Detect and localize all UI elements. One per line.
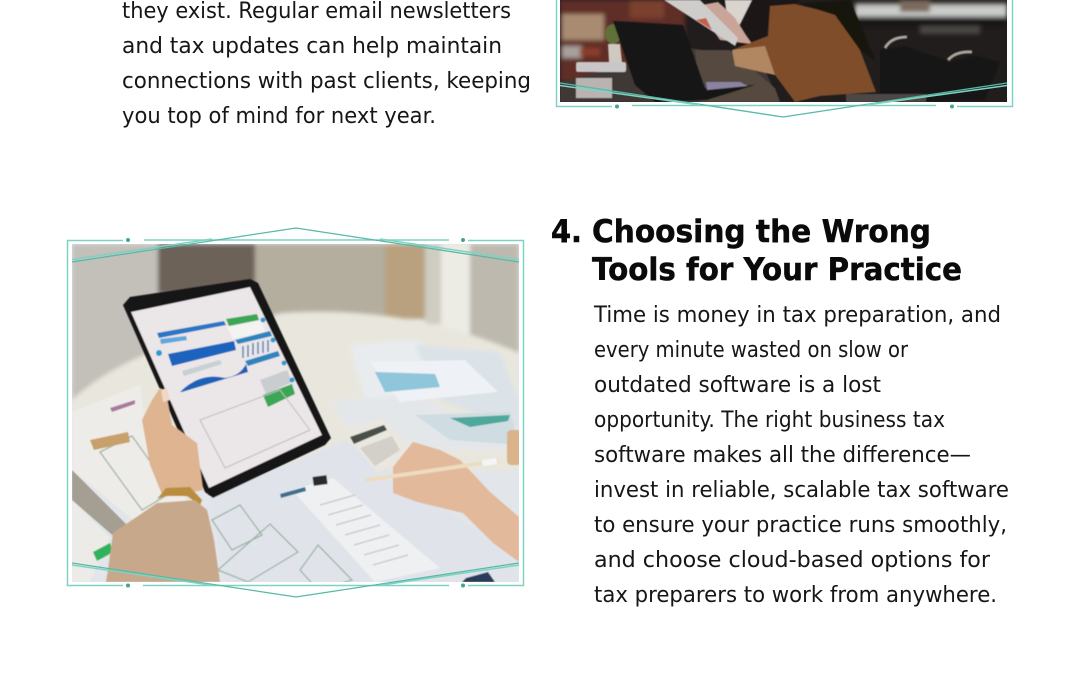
text block: section 4 body (593, 303, 1009, 608)
right hand and forearm (393, 442, 519, 562)
tablet (123, 279, 331, 498)
leather chair (880, 46, 1000, 102)
text block: section 4 body: opportunity. The right business tax (594, 408, 945, 433)
text block: tail of section 3: connections with past clients, keeping (122, 69, 531, 94)
text block: section 4 body: to ensure your practice runs smoothly, (594, 513, 1007, 538)
heading: section 4: Tools for Your Practice (592, 252, 962, 288)
table top (560, 48, 780, 102)
text block: section 4 body: software makes all the difference— (594, 443, 971, 468)
decorative frame: bottom image (68, 228, 524, 597)
text block: tail of section 3: you top of mind for next year. (122, 104, 436, 129)
photo: colleagues reviewing documents at a laptop (560, 0, 1007, 102)
text block: section 4 body: and choose cloud-based options for (594, 548, 991, 573)
decorative frame: top image (556, 0, 1012, 117)
laptop (613, 21, 755, 102)
left hand (142, 388, 203, 497)
document held up (664, 0, 738, 46)
pencil (367, 461, 497, 480)
text block: tail of section 3: and tax updates can help maintain (122, 34, 502, 59)
text block: section 4 body: every minute wasted on slow or (594, 338, 909, 363)
infographic page (66, 0, 1014, 606)
text block: section 4 body: outdated software is a lost (594, 373, 881, 398)
text block: tail of section 3 (122, 0, 531, 129)
heading: section 4: Choosing the Wrong (592, 214, 931, 250)
heading: section 4 (551, 214, 962, 288)
beige sleeve (106, 500, 220, 582)
text block: section 4 body: tax preparers to work from anywhere. (594, 583, 997, 608)
brown sweater (732, 4, 876, 102)
text block: section 4 body: Time is money in tax preparation, and (593, 303, 1001, 328)
heading: section 4: 4. (551, 214, 582, 250)
calculator (350, 419, 399, 472)
gold bracelet (157, 487, 202, 505)
coffee cup (507, 430, 521, 465)
papers (72, 386, 186, 519)
text block: section 4 body: invest in reliable, scalable tax software (594, 478, 1009, 503)
photo: hands with tablet and tax papers (72, 244, 521, 590)
person in white and black (720, 0, 800, 48)
tablet screen content (157, 321, 226, 338)
